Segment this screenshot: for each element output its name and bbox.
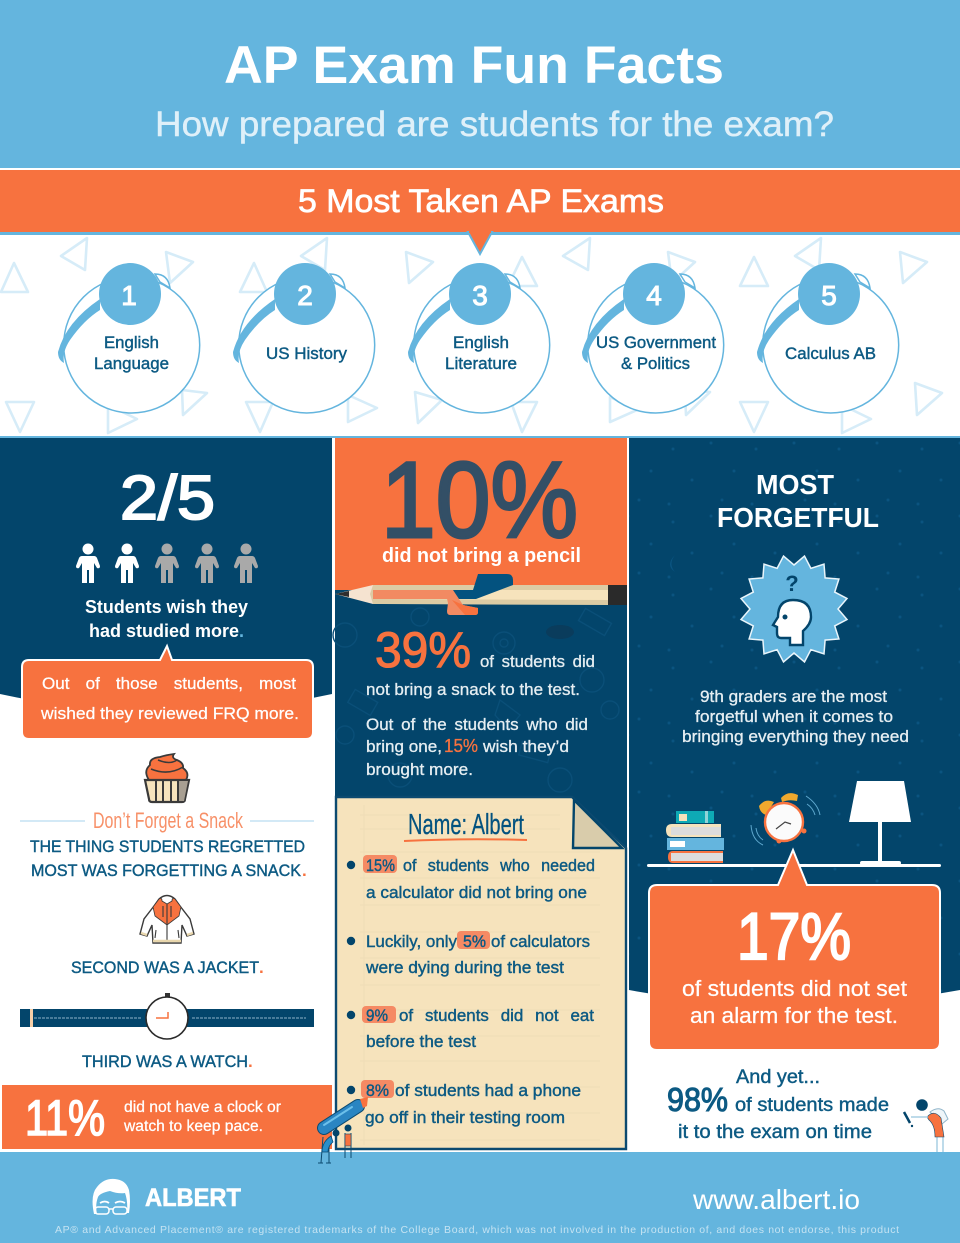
item: did not eat	[347, 1006, 594, 1051]
footer url: www.albert.io	[692, 1184, 860, 1215]
item: phone went off: 8%	[366, 1082, 389, 1100]
panel: middle navy snack: brought more.	[366, 761, 473, 779]
icon: watch	[20, 993, 314, 1039]
text: 9th graders: forgetful when it comes to	[695, 708, 893, 726]
text: forgetting a snack: MOST WAS FORGETTING A SNACK	[31, 861, 302, 880]
item: phone went off: of students had a phone	[395, 1082, 581, 1100]
item: did not eat: 9%	[366, 1007, 388, 1025]
panel: 11 percent clock stat: 11%	[25, 1090, 105, 1146]
icon: forgetful head badge	[741, 556, 847, 662]
trademark note: AP® and Advanced Placement® are registered trademarks of the College Board, which was not involved in the production of, and does not endorse, this product	[55, 1224, 899, 1236]
text: 9th graders	[682, 688, 909, 746]
text: second was a jacket: SECOND WAS A JACKET	[71, 958, 259, 977]
handwritten name: Name: Albert	[408, 809, 524, 841]
panel: right most forgetful: FORGETFUL	[717, 502, 879, 533]
heading: most forgetful: MOST	[756, 469, 834, 500]
text: students wish they had studied more: Students wish they	[85, 597, 248, 617]
item: calculator needed	[347, 855, 595, 902]
text: students wish they had studied more	[85, 597, 248, 641]
item: did not eat: of students did not eat	[399, 1007, 594, 1025]
icon: ringing alarm clock	[751, 793, 820, 845]
icon: cupcake	[145, 754, 189, 802]
background triangles	[1, 238, 942, 433]
panel: middle navy snack: Out of the students who did	[366, 716, 588, 734]
item: phone went off	[347, 1080, 581, 1127]
text: 9th graders: bringing everything they need	[682, 728, 909, 746]
text: third was a watch: THIRD WAS A WATCH	[82, 1052, 248, 1071]
title: AP Exam Fun Facts	[224, 36, 724, 95]
icon: pencil with ribbon	[335, 574, 627, 615]
callout: 17 percent alarm: 17%	[737, 899, 851, 973]
exam circle 1: English Language: 1	[121, 280, 137, 311]
callout: FRQ review: Out of those students, most	[42, 675, 296, 693]
text: 98 percent on time: 98%	[667, 1081, 728, 1118]
exam circle 5: Calculus AB	[757, 263, 899, 413]
panel: middle pencil stat: did not bring a pencil	[382, 545, 581, 567]
panel: middle navy snack: of students did	[480, 653, 595, 671]
panel: right most forgetful	[629, 438, 960, 1005]
exam circle 2: US History: 2	[297, 280, 313, 311]
divider under exams	[0, 436, 960, 438]
panel: middle navy snack: wish they’d	[482, 738, 569, 756]
exam circle 2: US History: US History	[266, 345, 348, 363]
panel: 11 percent clock stat: watch to keep pace.	[123, 1118, 263, 1135]
exam circle 5: Calculus AB: 5	[821, 280, 837, 311]
exam circle 4: US Government & Politics	[582, 263, 724, 413]
footer band	[0, 1152, 960, 1243]
icon: person with backpack	[904, 1099, 948, 1152]
callout: 17 percent alarm	[649, 850, 940, 1050]
panel: middle pencil stat: 10%	[381, 439, 578, 560]
icon: albert logo	[93, 1179, 130, 1214]
section banner: 5 most taken AP exams	[0, 170, 960, 254]
exam circle 4: US Government & Politics: & Politics	[621, 355, 690, 373]
item: dying calculators: 5%	[463, 933, 486, 951]
icon: stack of books	[666, 811, 724, 863]
exam circle 3: English Literature: Literature	[445, 355, 517, 373]
panel: 11 percent clock stat: did not have a clock or	[124, 1099, 281, 1116]
icon: lamp	[849, 781, 911, 865]
panel: notepaper	[336, 797, 626, 1149]
panel: middle navy snack: bring one,	[366, 738, 442, 756]
panel: middle navy snack	[333, 590, 627, 860]
icon: jacket	[140, 896, 194, 943]
panel: middle pencil stat	[335, 438, 627, 598]
panel: 11 percent clock stat	[2, 1085, 332, 1149]
callout: FRQ review: wished they reviewed FRQ more.	[40, 705, 299, 723]
exam circle 3: English Literature	[408, 263, 550, 413]
logo wordmark: ALBERT	[145, 1184, 241, 1212]
callout: 17 percent alarm: an alarm for the test.	[690, 1003, 898, 1028]
stat: 39 percent snack: 39%	[375, 622, 471, 678]
text: second was a jacket: .	[259, 958, 264, 977]
exam circle 1: English Language: English	[104, 334, 159, 352]
text: forgetting a snack	[30, 837, 307, 880]
text: 98 percent on time	[667, 1067, 889, 1143]
subtitle: How prepared are students for the exam?	[155, 105, 834, 144]
text: students wish they had studied more: .	[239, 621, 244, 641]
item: calculator needed: of students who needed	[403, 857, 595, 875]
exam circle 2: US History	[233, 263, 375, 413]
text: forgetting a snack: THE THING STUDENTS REGRETTED	[30, 837, 305, 856]
item: dying calculators: of calculators	[491, 933, 590, 951]
item: calculator needed: a calculator did not bring one	[366, 884, 587, 902]
item: phone went off: go off in their testing room	[365, 1109, 565, 1127]
panel: left studied more	[0, 438, 332, 712]
shelf	[647, 864, 941, 867]
text: 98 percent on time: of students made	[735, 1094, 889, 1116]
text: students wish they had studied more: had studied more	[89, 621, 239, 641]
exam circle 1: English Language	[58, 263, 200, 413]
text: 98 percent on time: it to the exam on time	[678, 1121, 872, 1143]
item: dying calculators	[347, 931, 590, 977]
text: forgetting a snack: .	[302, 861, 307, 880]
icon: five people	[76, 544, 258, 583]
panel: middle navy snack: not bring a snack to the test.	[366, 681, 580, 699]
panel: middle navy snack: 15%	[444, 736, 478, 756]
stat: 2/5: 2/5	[120, 464, 215, 533]
exam circle 4: US Government & Politics: US Government	[596, 334, 716, 352]
item: dying calculators: Luckily, only	[366, 933, 458, 951]
exam circle 3: English Literature: 3	[472, 280, 488, 311]
exam circle 4: US Government & Politics: 4	[646, 280, 662, 311]
heading: Don't Forget a Snack: Don’t Forget a Snack	[93, 808, 244, 833]
callout: FRQ review	[22, 646, 313, 739]
item: calculator needed: 15%	[366, 857, 395, 875]
item: did not eat: before the test	[366, 1033, 476, 1051]
text: 98 percent on time: And yet...	[736, 1067, 820, 1088]
callout: 17 percent alarm: of students did not set	[682, 976, 907, 1001]
exam circle 3: English Literature: English	[453, 334, 509, 352]
exam circle 5: Calculus AB: Calculus AB	[785, 345, 876, 363]
icon: highlighter with two people	[318, 1097, 368, 1163]
item: dying calculators: were dying during the test	[365, 959, 564, 977]
text: third was a watch: .	[248, 1052, 253, 1071]
header band	[0, 0, 960, 168]
exam circle 1: English Language: Language	[94, 355, 169, 373]
icon: forgetful head badge: ?	[785, 571, 799, 596]
text: 9th graders: 9th graders are the most	[700, 688, 887, 706]
section banner: 5 most taken AP exams: 5 Most Taken AP Exams	[298, 183, 664, 219]
